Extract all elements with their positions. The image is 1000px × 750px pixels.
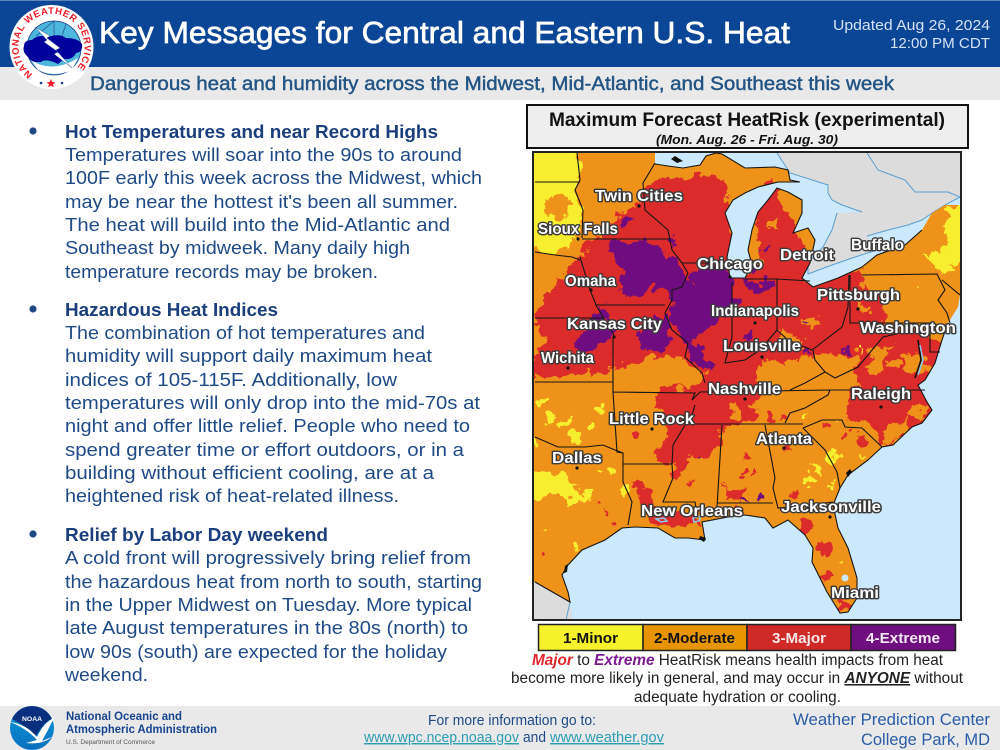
land and risk categories (534, 153, 960, 612)
message: hazardous heat indices (29, 299, 480, 506)
NOAA agency name: National Oceanic and (66, 711, 182, 723)
NOAA agency name: U.S. Department of Commerce (66, 740, 156, 746)
city labels: Nashville (708, 381, 781, 398)
icon: National Weather Service logo: NATIONAL WEATHER SERVICE (12, 7, 92, 79)
message: relief by Labor Day: in the Upper Midwest on Tuesday. More typical (65, 594, 472, 615)
city labels: Jacksonville (781, 499, 881, 516)
city labels: Twin Cities (595, 188, 683, 205)
city labels: Omaha (565, 273, 616, 290)
category: moderate patches (525, 217, 928, 482)
panel: key messages (29, 121, 482, 685)
message: hazardous heat indices: The combination of hot temperatures and (65, 322, 425, 343)
city labels: Little Rock (609, 411, 694, 428)
Weather Prediction Center credit: Weather Prediction Center (793, 710, 990, 729)
city labels: New Orleans (641, 503, 743, 520)
NOAA agency name: Atmospheric Administration (66, 722, 217, 736)
city labels (538, 188, 956, 602)
icon: NOAA logo: NOAA (22, 716, 42, 723)
message: hazardous heat indices: humidity will support daily maximum heat (65, 345, 432, 366)
message: hot temperatures: Hot Temperatures and near Record Highs (65, 121, 438, 142)
legend: HeatRisk categories: 3-Major (772, 630, 826, 647)
message: hazardous heat indices: indices of 105-115F. Additionally, low (65, 369, 398, 390)
icon: NOAA logo (10, 706, 54, 750)
state boundaries (535, 153, 960, 525)
more information links: For more information go to: (428, 713, 596, 729)
Weather Prediction Center credit (793, 710, 990, 749)
message: hazardous heat indices: Hazardous Heat Indices (65, 299, 278, 320)
message: hot temperatures: 100F early this week across the Midwest, which (65, 167, 482, 188)
city labels: Detroit (780, 247, 834, 264)
map: HeatRisk forecast (520, 140, 975, 620)
city labels: Louisville (723, 338, 801, 355)
map title box (527, 105, 968, 148)
message: hot temperatures: Southeast by midweek. Many daily high (65, 237, 410, 258)
message: hazardous heat indices: temperatures will only drop into the mid-70s at (65, 392, 480, 413)
Canada (777, 153, 960, 274)
more information links: www.wpc.ncep.noaa.gov (363, 730, 520, 746)
Weather Prediction Center credit: College Park, MD (861, 730, 990, 749)
city labels: Atlanta (756, 431, 812, 448)
map title box: (Mon. Aug. 26 - Fri. Aug. 30) (656, 133, 838, 147)
update timestamp: Updated Aug 26, 2024 (833, 17, 990, 34)
legend: HeatRisk categories (538, 624, 956, 650)
more information links (363, 713, 665, 746)
message: hazardous heat indices: heightened risk of heat-related illness. (65, 485, 399, 506)
city labels: Wichita (541, 350, 594, 367)
message: relief by Labor Day: the hazardous heat from north to south, starting (65, 571, 482, 592)
message: hazardous heat indices: spend greater time or effort outdoors, or in a (65, 439, 465, 460)
message: relief by Labor Day: A cold front will progressively bring relief from (65, 547, 471, 568)
city labels: Kansas City (567, 316, 662, 333)
subtitle: Dangerous heat and humidity across the Midwest, Mid-Atlantic, and Southeast this week (90, 73, 894, 95)
city labels: Washington (860, 320, 956, 337)
city labels: Sioux Falls (538, 221, 618, 238)
category: major (525, 175, 945, 488)
category: extreme (608, 240, 738, 340)
NOAA agency name (66, 711, 217, 746)
city labels: Dallas (552, 450, 602, 467)
legend: HeatRisk categories: 4-Extreme (866, 630, 940, 647)
legend: HeatRisk categories: 1-Minor (563, 630, 618, 647)
message: relief by Labor Day: weekend. (64, 664, 148, 685)
message: hazardous heat indices: night and offer little relief. People who need to (65, 415, 470, 436)
city labels: Raleigh (851, 386, 911, 403)
health impact note: adequate hydration or cooling. (634, 689, 841, 706)
city markers (566, 204, 883, 519)
message: hot temperatures: may be near the hottest it's been all summer. (65, 191, 458, 212)
legend: HeatRisk categories: 2-Moderate (654, 630, 735, 647)
city labels: Buffalo (851, 237, 904, 254)
city labels: Chicago (697, 256, 763, 273)
message: relief by Labor Day: late August temperatures in the 80s (north) to (65, 617, 468, 638)
health impact note: Major to Extreme HeatRisk means health impacts from heat (532, 652, 944, 669)
title: Key Messages for Central and Eastern U.S. Heat (99, 15, 790, 50)
city labels: Pittsburgh (817, 287, 900, 304)
message: hot temperatures (29, 121, 482, 282)
message: relief by Labor Day: Relief by Labor Day weekend (65, 524, 328, 545)
message: relief by Labor Day: low 90s (south) are expected for the holiday (65, 641, 448, 662)
more information links: www.weather.gov (549, 730, 665, 746)
update timestamp (833, 17, 990, 52)
message: hot temperatures: The heat will build into the Mid-Atlantic and (65, 214, 450, 235)
category: minor (534, 153, 584, 255)
header bar (0, 0, 1000, 67)
message: hot temperatures: Temperatures will soar into the 90s to around (65, 144, 462, 165)
footer bar (0, 706, 1000, 750)
health impact note (511, 652, 964, 706)
city labels: Indianapolis (711, 303, 799, 320)
coastline (535, 153, 948, 613)
message: hazardous heat indices: building without efficient cooling, are at a (65, 462, 435, 483)
map title box: Maximum Forecast HeatRisk (experimental) (549, 110, 945, 131)
Mexico (534, 582, 572, 620)
more information links: and (523, 730, 546, 746)
message: relief by Labor Day (29, 524, 482, 685)
city labels: Miami (831, 585, 879, 602)
subtitle band (0, 67, 1000, 100)
message: hot temperatures: temperature records may be broken. (65, 261, 378, 282)
health impact note: become more likely in general, and may occur in ANYONE without (511, 670, 964, 687)
update timestamp: 12:00 PM CDT (890, 35, 990, 52)
